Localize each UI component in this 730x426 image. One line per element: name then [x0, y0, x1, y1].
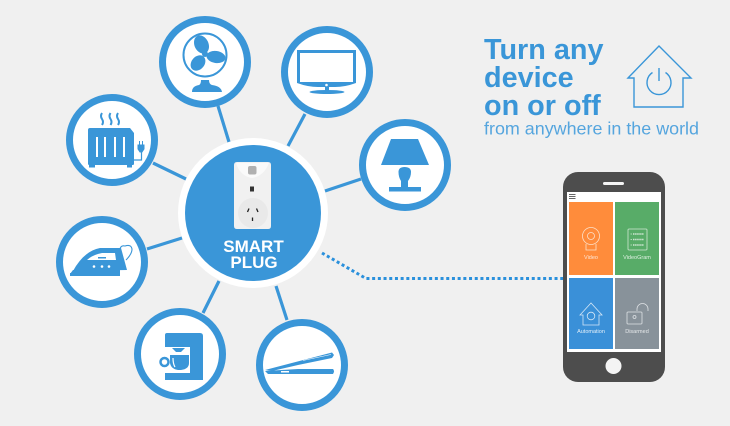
- tile: disarmed: Disarmed: [625, 329, 649, 335]
- tile: automation: [569, 278, 613, 349]
- heading: Turn any: [484, 34, 603, 66]
- connector lines: [147, 106, 361, 320]
- dotted connector to phone: [322, 253, 563, 278]
- icon: house with power symbol: [628, 46, 691, 107]
- device: hair straightener: [260, 322, 344, 408]
- device: coffee machine: [138, 312, 222, 396]
- tile: videogram: [615, 202, 659, 275]
- device: radiator: [70, 98, 154, 182]
- device: fan: [162, 20, 248, 104]
- tile: video: Video: [584, 255, 598, 261]
- hub: smart plug: PLUG: [230, 253, 278, 272]
- menu icon: [569, 194, 576, 198]
- tile: automation: Automation: [577, 329, 605, 335]
- heading: device: [484, 62, 574, 94]
- heading: [484, 34, 699, 138]
- tile: video: [569, 202, 613, 275]
- heading: on or off: [484, 90, 601, 122]
- home button: [606, 358, 622, 374]
- tile: disarmed: [615, 278, 659, 349]
- phone screen: [567, 192, 661, 352]
- subheading: from anywhere in the world: [484, 118, 699, 138]
- device: television: [284, 30, 370, 114]
- device: table lamp: [362, 122, 448, 208]
- hub: smart plug: [178, 138, 328, 288]
- phone: [563, 172, 665, 382]
- tile: videogram: VideoGram: [623, 255, 651, 261]
- label: smart plug: SMART: [223, 237, 284, 256]
- device: iron: [60, 220, 144, 304]
- icon: smart plug device: [234, 162, 271, 229]
